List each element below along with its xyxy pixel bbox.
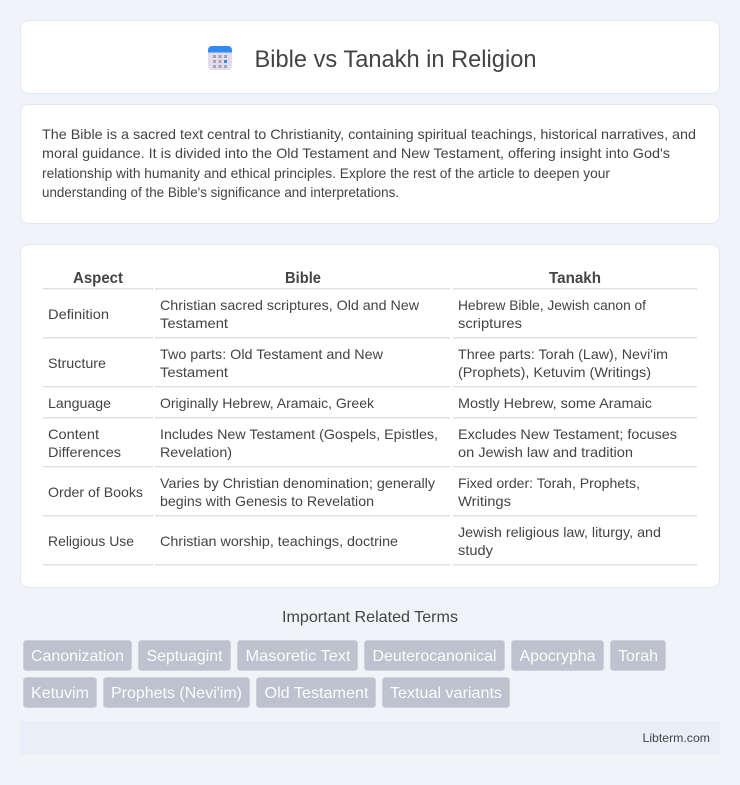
related term tags (24, 640, 666, 708)
row: content differences: Excludes New Testament; focuses (458, 426, 677, 442)
tag: Masoretic Text (238, 640, 358, 670)
row: content differences: Revelation) (160, 444, 232, 460)
tag: Septuagint (138, 640, 230, 670)
tag: Old Testament: Old Testament (264, 685, 369, 702)
tag: Septuagint: Septuagint (146, 648, 223, 665)
tag: Torah: Torah (618, 648, 658, 665)
row: order of books: Writings (458, 493, 511, 509)
row: structure: Two parts: Old Testament and New (160, 346, 384, 362)
table header (73, 270, 601, 287)
tag: Canonization (24, 640, 132, 670)
row: language: Mostly Hebrew, some Aramaic (458, 395, 652, 411)
tag: Ketuvim: Ketuvim (31, 685, 89, 702)
row: language: Language (48, 395, 111, 411)
row: definition (48, 297, 646, 331)
row: language (48, 395, 652, 411)
intro text: The Bible is a sacred text central to Christianity, containing spiritual teachings, historical narratives, and (42, 126, 696, 142)
row: content differences (48, 426, 677, 460)
panel: introduction (20, 104, 720, 224)
row: content differences: Content (48, 426, 99, 442)
row: structure: Testament (160, 364, 228, 380)
table header: Bible (285, 270, 321, 287)
tag: Deuterocanonical: Deuterocanonical (372, 648, 496, 665)
tag: Old Testament (256, 678, 376, 708)
table header: Aspect (73, 270, 124, 287)
heading: related terms: Important Related Terms (282, 609, 458, 626)
panel: comparison table (20, 244, 720, 588)
tag: Textual variants: Textual variants (390, 685, 502, 702)
tag: Masoretic Text: Masoretic Text (246, 648, 351, 665)
row: order of books: Varies by Christian denomination; generally (160, 475, 435, 491)
row: content differences: Differences (48, 444, 121, 460)
row: religious use: Jewish religious law, liturgy, and (458, 524, 661, 540)
tag: Prophets (Nevi'im): Prophets (Nevi'im) (111, 685, 242, 702)
row: language: Originally Hebrew, Aramaic, Greek (160, 395, 375, 411)
row: religious use: Christian worship, teachings, doctrine (160, 533, 398, 549)
tag: Textual variants (382, 678, 510, 708)
panel: title header (20, 20, 720, 94)
row: definition: Definition (48, 306, 109, 322)
row: religious use (48, 524, 661, 558)
row: definition: Testament (160, 315, 228, 331)
row: order of books: Order of Books (48, 484, 143, 500)
table rules (43, 288, 697, 566)
icon: calendar (208, 46, 232, 70)
intro text: moral guidance. It is divided into the Old Testament and New Testament, offering insight into God's (42, 145, 670, 161)
row: religious use: study (458, 542, 493, 558)
row: definition: Christian sacred scriptures, Old and New (160, 297, 420, 313)
row: definition: Hebrew Bible, Jewish canon of (458, 297, 646, 313)
row: order of books: Fixed order: Torah, Prophets, (458, 475, 640, 491)
tag: Ketuvim (24, 678, 96, 708)
tag: Prophets (Nevi'im) (104, 678, 250, 708)
row: structure: (Prophets), Ketuvim (Writings) (458, 364, 651, 380)
footer (20, 721, 720, 755)
row: definition: scriptures (458, 315, 522, 331)
title: Bible vs Tanakh in Religion (254, 46, 536, 73)
intro text (42, 126, 696, 200)
row: structure: Three parts: Torah (Law), Nevi'im (458, 346, 668, 362)
row: content differences: on Jewish law and tradition (458, 444, 633, 460)
tag: Deuterocanonical (364, 640, 504, 670)
row: structure (48, 346, 668, 380)
row: order of books (48, 475, 640, 509)
table header: Tanakh (549, 270, 601, 287)
tag: Torah (610, 640, 666, 670)
row: structure: Structure (48, 355, 106, 371)
intro text: relationship with humanity and ethical principles. Explore the rest of the article to deepen your (42, 165, 610, 181)
row: religious use: Religious Use (48, 533, 134, 549)
row: order of books: begins with Genesis to Revelation (160, 493, 374, 509)
tag: Canonization: Canonization (31, 648, 124, 665)
intro text: understanding of the Bible's significance and interpretations. (42, 184, 399, 200)
tag: Apocrypha: Apocrypha (520, 648, 596, 665)
tag: Apocrypha (512, 640, 604, 670)
row: content differences: Includes New Testament (Gospels, Epistles, (160, 426, 438, 442)
footer credit: Libterm.com (642, 731, 710, 745)
